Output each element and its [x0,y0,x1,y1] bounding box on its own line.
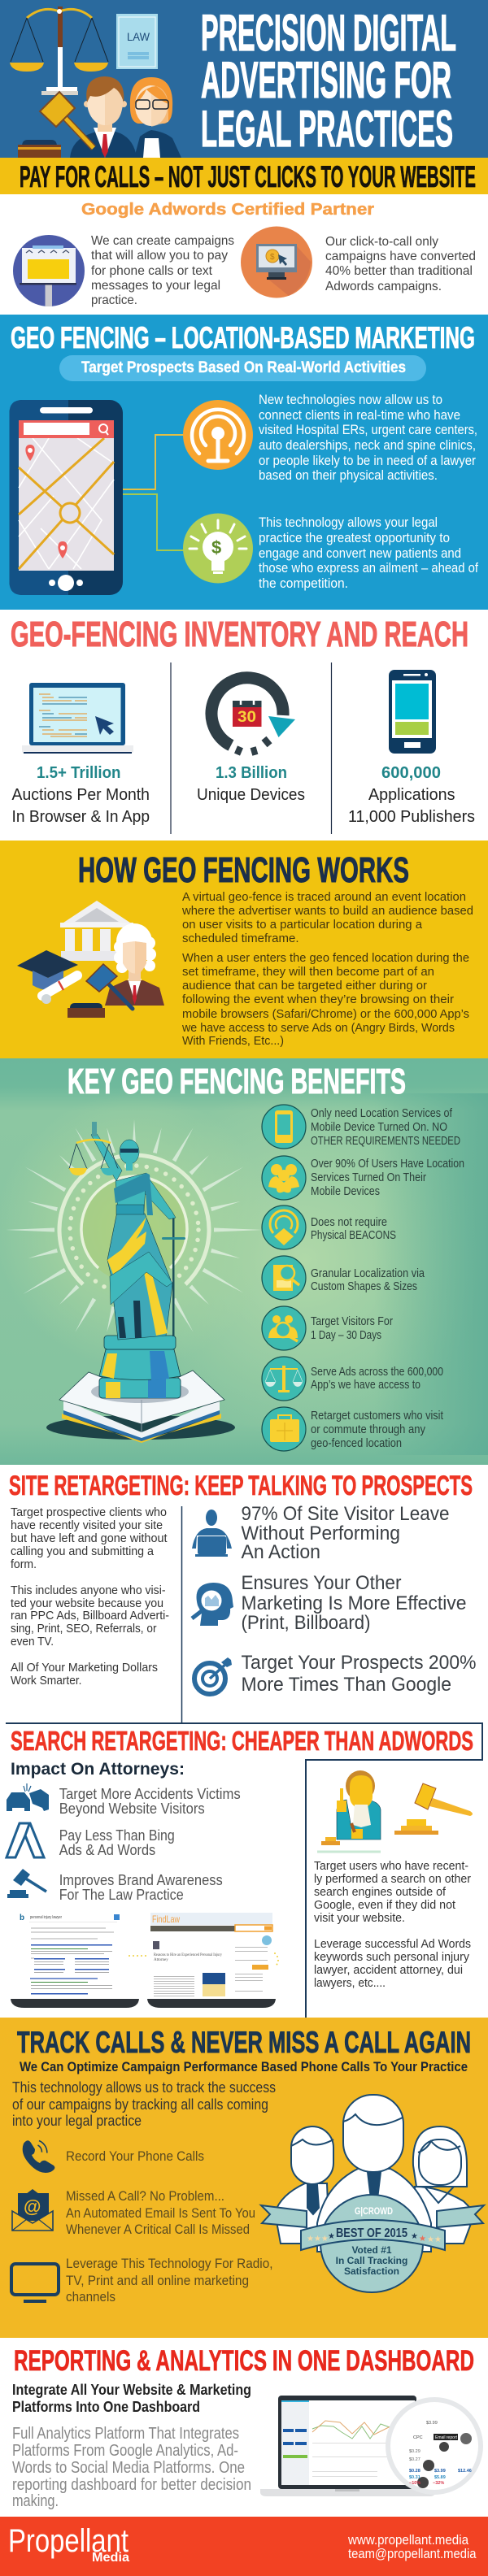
stat: applications: 600,000 [381,764,441,782]
illustration: dashboard laptop: $0.27 [409,2457,420,2462]
icon: 30 day calendar dial: 30 [237,709,256,726]
icon: click to call monitor [241,226,312,298]
text: geo fence description: audience that can be targeted either during or [182,979,427,993]
logo: propellant media: Media [92,2551,129,2565]
icon: 30 day calendar dial [211,678,295,752]
icon: woman lawyer [130,77,181,158]
text: search retargeting description: lawyers, etc.... [314,1976,386,1990]
text: site retargeting description: calling you and submitting a [11,1545,155,1558]
text: geo fence description: set timeframe, they will then become part of an [182,965,434,979]
icon: smartphone [389,670,436,754]
badge ribbon [301,2220,445,2250]
text: brand awareness [59,1872,223,1903]
text: click to call results: Adwords campaigns. [325,280,442,293]
text: connect clients: connect clients in real-time who have [259,407,460,423]
subheading: Impact On Attorneys: [11,1760,185,1779]
icon: adwords logo [7,1823,44,1857]
benefit: no beacons [262,1205,396,1249]
text: site retargeting description: sing, Print, SEO, Referrals, or [11,1622,157,1636]
text: engage and convert: practice the greatest opportunity to [259,530,450,545]
subheading pill: Target Prospects Based On Real-World Activities [81,359,406,376]
icon: law book [116,14,158,69]
text: pay less: Ads & Ad Words [59,1842,155,1858]
contact details: www.propellant.media [347,2532,468,2548]
icon: laptop with code [22,683,133,754]
stat: other marketing [241,1572,467,1634]
benefit: 90 percent of users: Mobile Devices [311,1184,380,1198]
screenshot: bing search results: b [20,1914,24,1922]
text: engage and convert: This technology allows your legal [259,515,438,530]
text: missed a call: Whenever A Critical Call Is Missed [66,2222,250,2237]
text: search retargeting description: search engines outside of [314,1885,447,1899]
stat: site visitors leave [241,1503,449,1563]
text: engage and convert [259,515,478,591]
benefit: granular localization: Custom Shapes & Sizes [311,1279,417,1293]
icon: gavel [7,1869,46,1898]
benefit: 90 percent of users: Services Turned On Their [311,1171,426,1184]
screenshot: findlaw article [147,1913,276,2008]
icon: email envelope [12,2189,53,2231]
icon: phone with signal [23,2139,54,2173]
screenshot: findlaw article: Reasons to Hire an Experienced Personal Injury [154,1953,222,1957]
text: site retargeting description: Work Smarter. [11,1675,81,1688]
contact details [347,2532,477,2561]
text: analytics platform: reporting dashboard for better decision [12,2476,251,2494]
text: call tracking intro: of our campaigns by tracking all calls coming [12,2096,268,2113]
benefit: location services [262,1105,460,1149]
icon: gavel and block [18,92,94,158]
illustration: dashboard laptop: −32% [433,2481,444,2486]
badge seal [320,2195,423,2292]
text: analytics platform: Words to Social Media Platforms. One [12,2459,245,2477]
icon: billboard [13,235,85,306]
icon: television [11,2264,59,2303]
text: site retargeting description: form. [11,1558,37,1571]
icon: click to call monitor: $ [270,253,275,262]
illustration: dashboard laptop: $3.99 [434,2469,446,2474]
illustration: dashboard laptop [260,2396,481,2496]
icon: lightbulb with dollar [183,514,253,584]
subheading: Integrate All Your Website & Marketing [12,2382,251,2398]
stat: 200 percent: More Times Than Google [241,1674,451,1696]
illustration: dashboard laptop: $5.89 [434,2475,446,2480]
text: brand awareness: Improves Brand Awareness [59,1872,223,1888]
stat: auctions: 1.5+ Trillion [37,764,120,782]
text: accident victims [59,1786,241,1817]
icon: broadcast signal [183,400,253,470]
panel: google adwords partner [0,194,488,315]
text: search retargeting description: keywords such personal injury [314,1950,469,1964]
benefit: retarget customers: geo-fenced location [311,1436,402,1450]
text: click to call results: Our click-to-call only [325,235,438,249]
text: pay for phone calls: messages to your legal [91,279,220,293]
illustration: dashboard laptop: $3.99 [426,2421,438,2426]
text: search retargeting description: Leverage successful Ad Words [314,1937,471,1951]
text: engage and convert: the competition. [259,576,348,591]
illustration: dashboard laptop: Email report [435,2435,458,2440]
benefit: serve ads: App’s we have access to [311,1378,420,1392]
icon: person at laptop [192,1510,232,1557]
arrow: connector to signal icon [123,435,184,489]
stat: devices [197,764,305,804]
panel: footer [0,2517,488,2576]
benefit: target visitors: Target Visitors For [311,1314,393,1328]
illustration: dashboard laptop: −10% [409,2481,420,2486]
arrow: connector to lightbulb icon [123,494,184,550]
text: geo fence description: With Friends, Etc...) [182,1034,284,1048]
text: call tracking intro [12,2079,276,2129]
benefit: location services: Mobile Device Turned On. NO [311,1120,447,1134]
icon: scales of justice [10,7,108,95]
stat: 200 percent: Target Your Prospects 200% [241,1652,477,1674]
text: connect clients [259,392,477,483]
subheading: Platforms Into One Dashboard [12,2399,200,2415]
panel: geo fencing [0,315,488,610]
decoration: connecting dots [129,1953,278,1967]
text: accident victims: Target More Accidents Victims [59,1786,241,1802]
illustration: dashboard laptop: $0.29 [409,2449,420,2454]
text: brand awareness: For The Law Practice [59,1887,184,1903]
logo: propellant media: Propellant [8,2523,129,2559]
benefit: location services: Only need Location Services of [311,1106,453,1120]
illustration: dashboard laptop: $0.31 [409,2475,420,2480]
text: pay for phone calls: practice. [91,293,137,307]
text: geo fence description: on user visits to a particular location during a [182,918,423,932]
text: analytics platform [12,2425,251,2510]
text: search retargeting description: Google, even if they did not [314,1898,456,1912]
text: site retargeting description: even TV. [11,1636,54,1649]
stat: site visitors leave: Without Performing [241,1523,400,1544]
subheading [12,2382,251,2415]
text: analytics platform: Platforms From Google Analytics, Ad- [12,2442,238,2460]
text: site retargeting description: ran PPC Ads, Billboard Adverti- [11,1609,169,1622]
heading: Google Adwords Certified Partner [81,201,374,219]
benefit: retarget customers: Retarget customers who visit [311,1409,444,1423]
text: site retargeting description: Target prospective clients who [11,1506,167,1519]
text: geo fence description: we have access to serve Ads on (Angry Birds, Words [181,1021,455,1035]
text: site retargeting description [11,1506,169,1688]
screenshot: bing search results [11,1914,139,2008]
text: pay for phone calls: for phone calls or text [91,264,213,278]
stat: other marketing: Marketing Is More Effective [241,1592,467,1614]
ribbon tails [261,2205,484,2227]
title [201,5,456,158]
icon: head with magnifier [192,1583,233,1626]
panel: header [0,0,488,158]
text: pay for phone calls: We can create campaigns [91,234,234,248]
text: search retargeting description: Target users who have recent- [314,1859,468,1873]
figure: left person [275,2126,333,2244]
text: pay for phone calls [91,234,234,307]
stat: devices: Unique Devices [197,785,305,804]
benefit: retarget customers [262,1407,444,1451]
icon: car crash [7,1783,49,1811]
screenshot: bing search results: personal injury lawyer [30,1915,62,1920]
text: site retargeting description: ted your website because you [11,1597,163,1610]
icon: target with arrow [194,1657,232,1694]
text: call tracking intro: This technology allows us to track the success [12,2079,276,2096]
figure: right person [413,2126,475,2244]
stat: devices: 1.3 Billion [216,764,287,782]
text: search retargeting description: visit your website. [314,1911,405,1925]
text: pay less [59,1827,175,1858]
text: geo fence description: scheduled timeframe. [182,932,299,945]
benefit: 90 percent of users [262,1156,464,1200]
stat: site visitors leave: 97% Of Site Visitor Leave [241,1503,449,1525]
benefit: serve ads [262,1357,443,1401]
stat: other marketing: Ensures Your Other [241,1572,402,1594]
text: search retargeting description [314,1859,471,1990]
text: analytics platform: Full Analytics Platform That Integrates [12,2425,239,2443]
stat: applications [348,764,475,826]
text: pay less: Pay Less Than Bing [59,1827,175,1844]
illustration: dashboard laptop: $0.28 [409,2469,420,2474]
panel: search retargeting [0,1723,488,2018]
badge ribbon: ★ [411,2232,418,2241]
text: click to call results: campaigns have converted [325,250,476,263]
badge ribbon: ★★★ [307,2235,329,2244]
text: leverage technology [66,2256,273,2304]
text: site retargeting description: have recently visited your site [11,1519,163,1532]
badge ribbon: ★ [419,2235,426,2244]
icon: lightbulb with dollar: $ [211,537,221,558]
text: geo fence description: A virtual geo-fence is traced around an event location [182,890,466,904]
text: leverage technology: channels [66,2289,115,2304]
benefit: serve ads: Serve Ads across the 600,000 [311,1365,443,1379]
illustration: dashboard laptop: $12.46 [458,2469,472,2474]
stat: 200 percent [241,1652,477,1696]
text: missed a call [66,2188,255,2237]
stat: applications: 11,000 Publishers [348,807,475,826]
text: geo fence description: where the advertiser wants to build an audience based [181,904,473,918]
badge ribbon: BEST OF 2015 [336,2226,407,2240]
stat: site visitors leave: An Action [241,1541,320,1563]
badge ribbon: ★★ [427,2235,442,2244]
badge seal: In Call Tracking [336,2255,407,2266]
figure: center person [317,2095,431,2252]
panel: inventory and reach [0,610,488,841]
illustration: lady justice statue [6,1119,263,1443]
icon: large gavel [394,1783,473,1835]
illustration: dashboard laptop: CPC [413,2435,423,2440]
badge seal: Satisfaction [344,2265,399,2277]
text: pay for phone calls: that will allow you to pay [91,249,228,263]
subheading pill [59,355,426,381]
stat: applications: Applications [368,785,455,804]
text: search retargeting description: lawyer, accident attorney, dui [314,1963,463,1977]
benefit: target visitors: 1 Day – 30 Days [311,1328,381,1342]
text: geo fence description: mobile browsers (Safari/Chrome) or the 600,000 App’s [182,1007,469,1021]
icon: man lawyer [70,76,137,158]
icon: email envelope: @ [24,2196,41,2217]
panel: how geo fencing works [0,841,488,1058]
stat: other marketing: (Print, Billboard) [241,1612,371,1634]
text: accident victims: Beyond Website Visitors [59,1801,205,1817]
text: click to call results: 40% better than traditional [325,264,473,278]
text: leverage technology: TV, Print and all online marketing [66,2273,249,2288]
text: site retargeting description: All Of Your Marketing Dollars [11,1662,158,1675]
text: call tracking intro: into your legal practice [12,2113,142,2129]
icon: judge illustration [317,1770,381,1852]
text: connect clients: New technologies now allow us to [259,392,442,407]
badge ribbon: ★ [328,2232,335,2241]
text: geo fence description: When a user enters the geo fenced location during the [182,951,469,965]
text: geo fence description: following the event when they’re browsing on their [182,993,454,1006]
panel: track calls [0,2018,488,2338]
screenshot: findlaw article: Attorney [154,1958,168,1962]
text: analytics platform: making. [12,2492,59,2510]
panel: key geo fencing benefits [0,1058,488,1465]
text: leverage technology: Leverage This Technology For Radio, [66,2256,273,2271]
benefit: no beacons: Does not require [311,1215,387,1229]
illustration: courthouse and judge [17,901,164,1018]
benefit: no beacons: Physical BEACONS [311,1228,396,1242]
text: engage and convert: engage and convert new patients and [259,545,461,561]
panel: site retargeting [0,1465,488,1723]
badge seal: Voted #1 [351,2244,392,2256]
text: missed a call: An Automated Email Is Sent To You [66,2205,255,2221]
stat: auctions: In Browser & In App [11,807,150,826]
stat: auctions: Auctions Per Month [11,785,150,804]
text: connect clients: based on their physical activities. [259,467,438,483]
illustration: g2 crowd badge [261,2095,484,2292]
text: missed a call: Missed A Call? No Problem... [66,2188,224,2204]
stat: auctions [11,764,150,826]
text: site retargeting description: This includes anyone who visi- [11,1584,166,1597]
benefit: granular localization: Granular Localization via [311,1266,425,1280]
benefit: granular localization [262,1256,425,1300]
panel: reporting and analytics [0,2338,488,2517]
benefit: retarget customers: or commute through any [311,1423,425,1436]
screenshot: findlaw article: FindLaw [152,1914,180,1925]
icon: phone with map [10,400,123,595]
text: geo fence description [181,890,473,1048]
badge seal: G|CROWD [355,2205,393,2217]
icon: law book: LAW [127,31,150,43]
text: record calls: Record Your Phone Calls [66,2148,204,2164]
text: click to call results [325,235,476,293]
benefit: target visitors [262,1306,393,1350]
text: site retargeting description: but have left and gone without [11,1532,168,1545]
text: search retargeting description: ly performed a search on other [314,1872,471,1886]
